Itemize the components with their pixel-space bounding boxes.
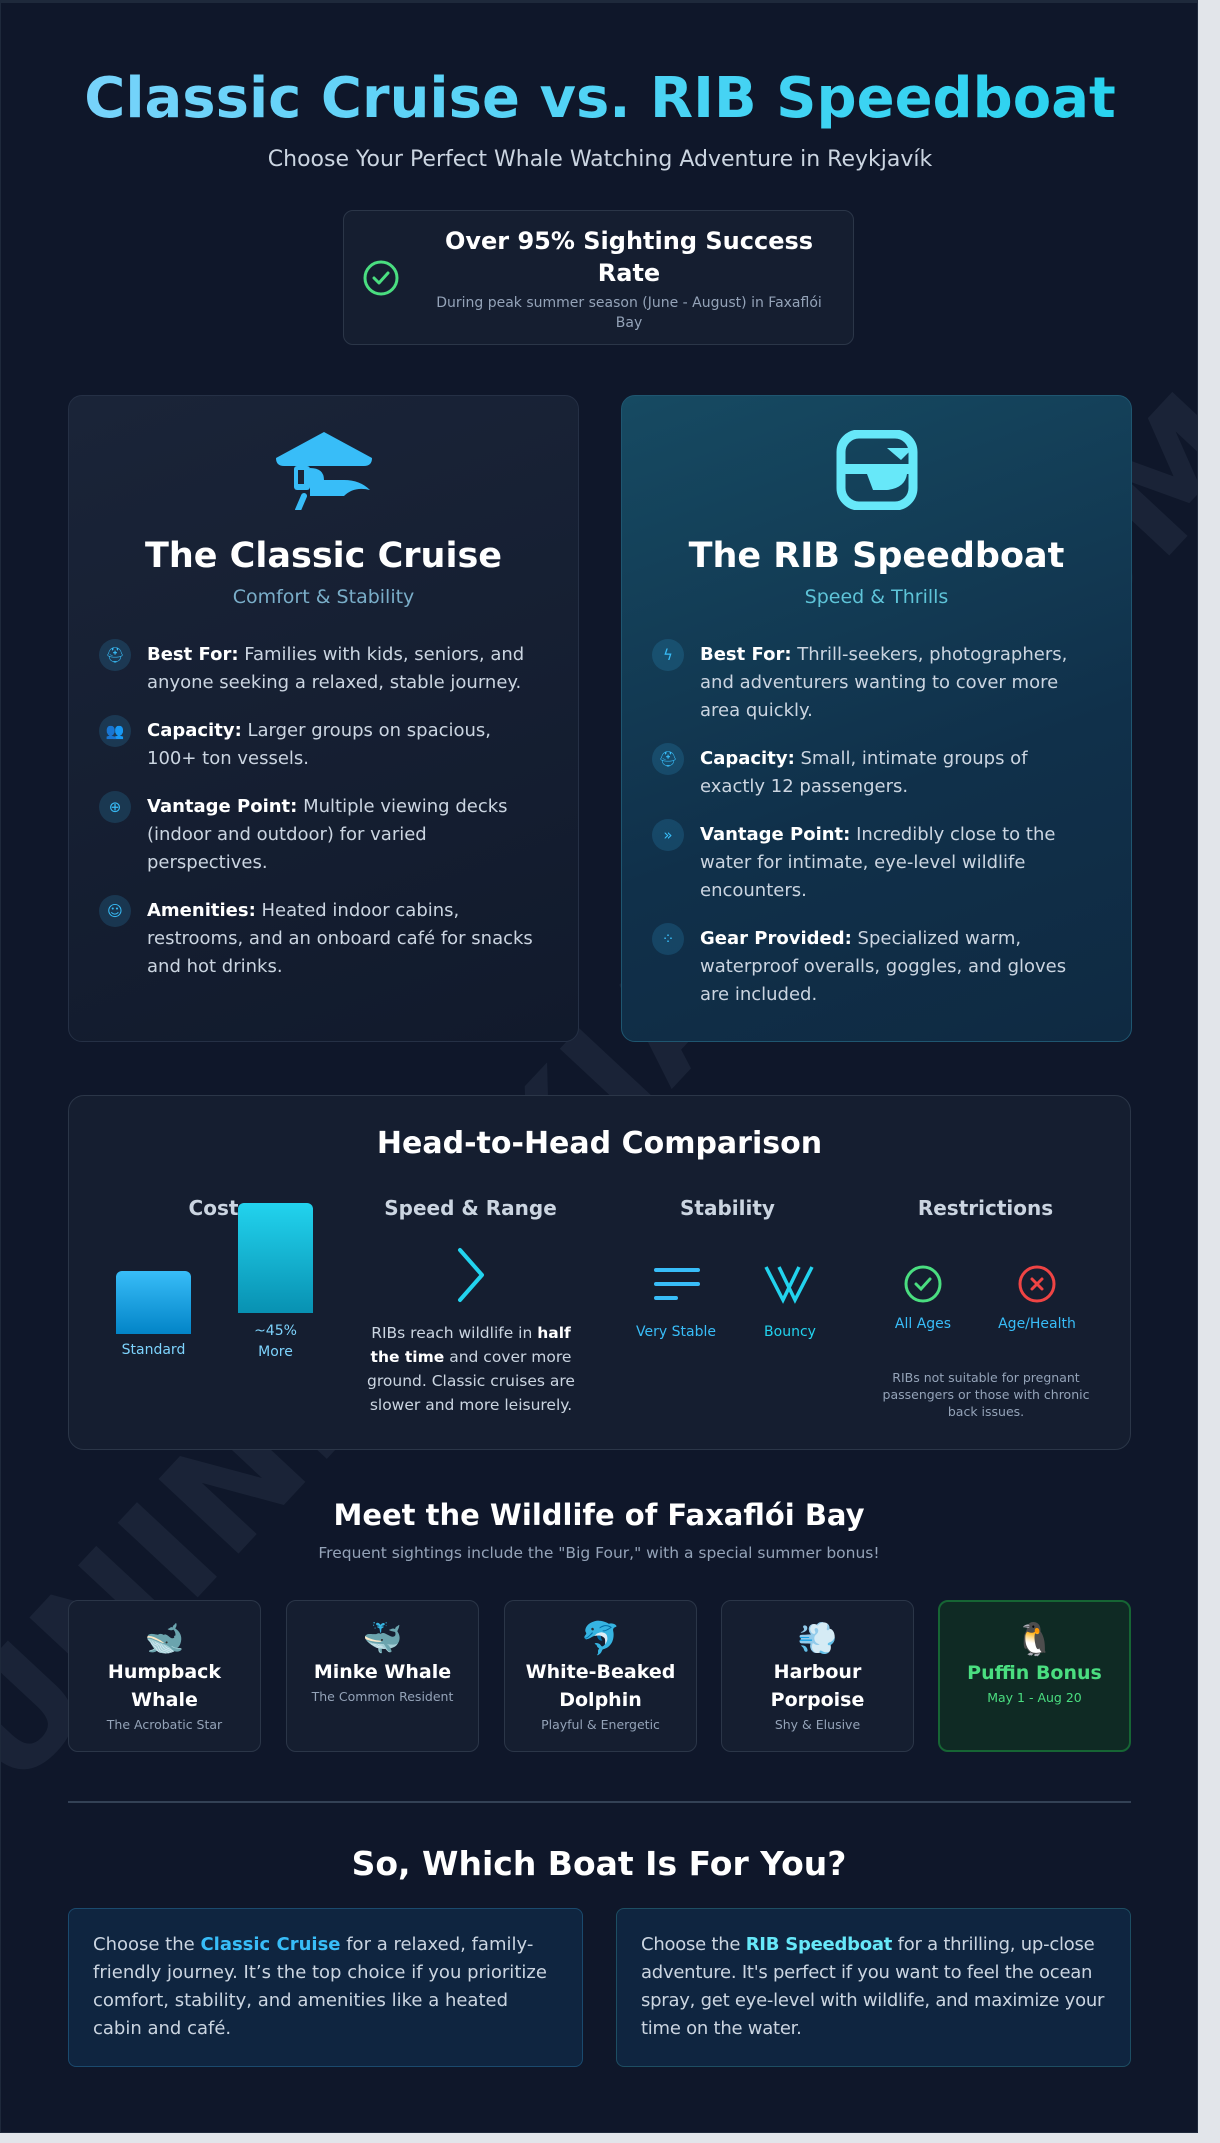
card: minke	[286, 1600, 479, 1752]
text: speed: RIBs reach wildlife in half the time and cover more ground. Classic cruises are slower and more leisurely.	[367, 1324, 575, 1414]
card: puffin: 🐧	[1015, 1620, 1054, 1658]
list: classic features: ⊕	[109, 798, 121, 816]
icon: chevron	[458, 1248, 484, 1302]
subheading: wildlife: Frequent sightings include the "Big Four," with a special summer bonus!	[318, 1544, 880, 1562]
box: classic recommendation	[68, 1908, 583, 2067]
card: humpback	[68, 1600, 261, 1752]
list: classic features: Capacity: Larger groups on spacious, 100+ ton vessels.	[147, 720, 491, 769]
success text: During peak summer season (June - August) in Faxaflói Bay	[436, 295, 822, 331]
list: RIB features: Best For: Thrill-seekers, photographers, and adventurers wanting to cover more area quickly.	[700, 644, 1067, 721]
card: puffin	[938, 1600, 1131, 1752]
list: classic features: Amenities: Heated indoor cabins, restrooms, and an onboard café for snacks and hot drinks.	[147, 900, 533, 977]
labels: restrictions	[895, 1316, 1076, 1332]
list: classic features: ☺	[107, 902, 123, 920]
heading: which boat: So, Which Boat Is For You?	[352, 1844, 846, 1883]
text: All Ages	[895, 1316, 951, 1332]
panel: classic cruise: Comfort & Stability	[233, 586, 414, 608]
list: classic features: Best For: Families with kids, seniors, and anyone seeking a relaxed, stable journey.	[147, 644, 524, 693]
column: restrictions: Restrictions	[918, 1196, 1053, 1220]
card: porpoise: Porpoise	[771, 1689, 864, 1711]
success text: Over 95% Sighting Success Rate	[445, 227, 813, 287]
card: minke: The Common Resident	[312, 1689, 453, 1704]
box: RIB recommendation: Choose the RIB Speedboat for a thrilling, up-close adventure. It's perfect if you want to feel the ocean spray, get eye-level with wildlife, and maximize your time on the water.	[641, 1934, 1104, 2039]
heading: The Classic Cruise	[145, 536, 502, 576]
list: RIB features: Gear Provided: Specialized warm, waterproof overalls, goggles, and gloves are included.	[700, 928, 1066, 1005]
success text	[436, 227, 822, 331]
subtitle: Choose Your Perfect Whale Watching Adventure in Reykjavík	[268, 147, 932, 172]
list: RIB features	[652, 639, 1067, 1005]
labels: stability	[636, 1324, 816, 1340]
list: RIB features: ϟ	[663, 646, 673, 664]
icon: stable lines	[654, 1268, 700, 1300]
card: dolphin: Dolphin	[559, 1689, 642, 1711]
card: dolphin: 🐬	[581, 1619, 620, 1657]
title	[1, 59, 1199, 139]
list: RIB features: Capacity: Small, intimate groups of exactly 12 passengers.	[700, 748, 1028, 797]
title: Classic Cruise vs. RIB Speedboat	[84, 66, 1116, 131]
card: minke: Minke Whale	[314, 1661, 451, 1683]
card: humpback: Humpback	[108, 1661, 221, 1683]
chart: cost bars	[116, 1203, 313, 1360]
card: porpoise	[721, 1600, 914, 1752]
card: porpoise: 💨	[798, 1619, 837, 1657]
card: dolphin	[504, 1600, 697, 1752]
chart: cost bars: ~45%	[254, 1323, 297, 1339]
panel: RIB speedboat: Speed & Thrills	[805, 586, 948, 608]
icon: classic boat	[276, 432, 372, 510]
list: RIB features: ⁘	[662, 930, 674, 948]
list: classic features: Vantage Point: Multiple viewing decks (indoor and outdoor) for varied perspectives.	[147, 796, 508, 873]
list: RIB features: ⛑	[658, 750, 678, 768]
text: Bouncy	[764, 1324, 816, 1340]
card: porpoise: Harbour	[774, 1661, 861, 1683]
column: speed & range: Speed & Range	[384, 1196, 557, 1220]
box: classic recommendation: Choose the Classic Cruise for a relaxed, family-friendly journey. It’s the top choice if you prioritize comfort, stability, and amenities like a heated cabin and café.	[93, 1934, 547, 2039]
card: humpback: 🐋	[145, 1619, 184, 1657]
text: Very Stable	[636, 1324, 716, 1340]
chart: cost bars: More	[258, 1344, 293, 1360]
icon: check circle	[364, 260, 398, 296]
column: stability: Stability	[680, 1196, 775, 1220]
list: classic features	[99, 639, 533, 977]
list: RIB features: Vantage Point: Incredibly close to the water for intimate, eye-level wildlife encounters.	[700, 824, 1055, 901]
card: puffin: Puffin Bonus	[967, 1662, 1102, 1684]
heading: The RIB Speedboat	[689, 536, 1064, 576]
card: humpback: The Acrobatic Star	[107, 1717, 222, 1732]
text: Age/Health	[998, 1316, 1076, 1332]
column: cost: Cost	[189, 1196, 238, 1220]
icon: all ages	[904, 1266, 942, 1302]
icon: RIB boat	[836, 430, 918, 510]
card: porpoise: Shy & Elusive	[775, 1717, 860, 1732]
heading: comparison: Head-to-Head Comparison	[377, 1126, 822, 1161]
icon: bouncy	[764, 1266, 814, 1304]
panel: head-to-head comparison	[68, 1095, 1131, 1450]
heading: wildlife: Meet the Wildlife of Faxaflói Bay	[333, 1498, 865, 1532]
card: humpback: Whale	[131, 1689, 198, 1711]
list: RIB features: »	[663, 826, 673, 844]
callout: success rate	[343, 210, 854, 345]
card: dolphin: White-Beaked	[526, 1661, 675, 1683]
panel: classic cruise	[68, 395, 579, 1042]
card: dolphin: Playful & Energetic	[541, 1717, 660, 1732]
chart: cost bars: Standard	[122, 1342, 185, 1358]
box: RIB recommendation	[616, 1908, 1131, 2067]
note: restrictions: RIBs not suitable for pregnant passengers or those with chronic back issues.	[883, 1370, 1089, 1419]
icon: age/health	[1018, 1266, 1056, 1302]
card: minke: 🐳	[363, 1619, 402, 1657]
card: puffin: May 1 - Aug 20	[987, 1690, 1082, 1705]
list: classic features: ⛑	[105, 646, 125, 664]
panel: RIB speedboat	[621, 395, 1132, 1042]
list: classic features: 👥	[106, 722, 124, 740]
